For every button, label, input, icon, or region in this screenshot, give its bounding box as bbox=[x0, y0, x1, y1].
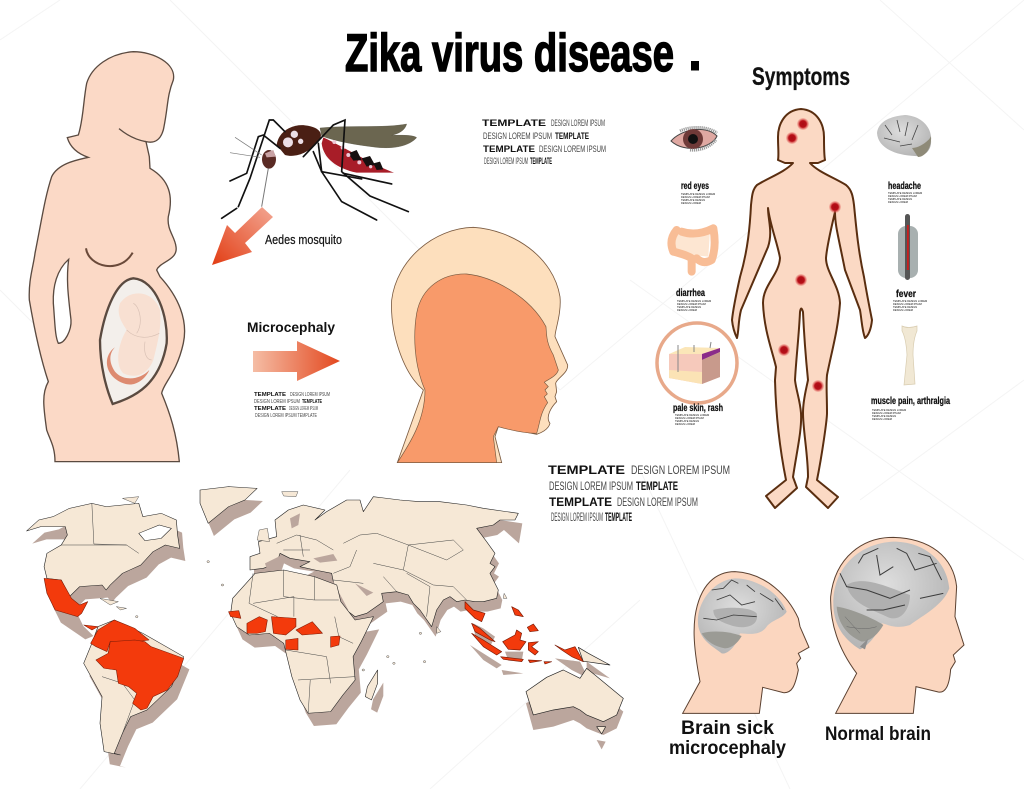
Brazil bbox=[96, 640, 184, 710]
microcephaly template text: DESIGN LOREM IPSUM TEMPLATE bbox=[255, 413, 317, 419]
label: red eyes bbox=[681, 181, 715, 205]
middle template text: TEMPLATE bbox=[605, 512, 632, 524]
label: fever: DESIGN LOREM bbox=[893, 308, 913, 312]
right arrow bbox=[253, 341, 340, 381]
land mass: Eurasia bbox=[250, 497, 518, 627]
abdomen bbox=[322, 137, 394, 173]
middle template text bbox=[548, 465, 730, 524]
label: brain sick microcephaly: Brain sick bbox=[681, 717, 774, 739]
middle template text: DESIGN LOREM IPSUM bbox=[631, 465, 730, 477]
label: red eyes: TEMPLATE DESIGN LOREM bbox=[681, 192, 715, 196]
legs bbox=[222, 120, 408, 220]
land mass: Africa bbox=[231, 570, 374, 713]
pain points bbox=[778, 118, 841, 392]
icon: red eye bbox=[671, 127, 717, 150]
label: headache: DESIGN LOREM bbox=[888, 200, 908, 204]
red affected countries: Southeast Asia bbox=[465, 602, 583, 664]
icon: skin section in circle bbox=[657, 323, 737, 403]
label: muscle pain, arthralgia: DESIGN LOREM bbox=[872, 417, 892, 421]
human body figure bbox=[732, 109, 872, 508]
middle template text: DESIGN LOREM IPSUM bbox=[617, 497, 698, 509]
microcephaly heading: Microcephaly bbox=[247, 320, 336, 335]
label: pale skin, rash: DESIGN LOREM bbox=[675, 422, 695, 426]
breast curve bbox=[86, 248, 133, 266]
head: normal brain bbox=[831, 537, 964, 713]
middle template text: TEMPLATE bbox=[636, 481, 678, 493]
country borders bbox=[61, 503, 467, 733]
label: fever bbox=[893, 289, 927, 312]
chin line bbox=[119, 129, 146, 142]
womb bbox=[100, 278, 167, 404]
icon: brain bbox=[877, 115, 931, 157]
top template text: TEMPLATE bbox=[482, 118, 546, 129]
red affected countries: Americas and Africa bbox=[44, 578, 340, 710]
label: muscle pain, arthralgia: TEMPLATE DESIGN bbox=[872, 414, 896, 418]
middle template text: DESIGN LOREM IPSUM bbox=[551, 512, 603, 524]
mosquito bbox=[222, 120, 417, 220]
Uganda bbox=[331, 636, 340, 647]
label: fever: TEMPLATE DESIGN LOREM bbox=[893, 299, 927, 303]
aedes mosquito label: Aedes mosquito bbox=[265, 232, 342, 247]
label: diarrhea: DESIGN LOREM IPSUM bbox=[677, 302, 706, 306]
top template text: DESIGN LOREM IPSUM bbox=[484, 156, 528, 167]
map shadows: Americas and Africa bbox=[32, 499, 383, 768]
head: brain sick microcephaly bbox=[683, 572, 809, 713]
placenta crescent bbox=[107, 347, 149, 385]
small islands bbox=[100, 492, 507, 671]
label: pale skin, rash: DESIGN LOREM IPSUM bbox=[675, 416, 704, 420]
label: muscle pain, arthralgia: DESIGN LOREM IPSUM bbox=[872, 411, 901, 415]
label: diarrhea bbox=[676, 288, 711, 312]
label: muscle pain, arthralgia: TEMPLATE DESIGN LOREM bbox=[872, 408, 906, 412]
middle template text: TEMPLATE bbox=[549, 497, 612, 509]
central head profile bbox=[392, 227, 568, 463]
label: headache bbox=[888, 181, 922, 204]
label: pale skin, rash: TEMPLATE DESIGN bbox=[675, 419, 699, 423]
top template text: DESIGN LOREM IPSUM bbox=[539, 144, 606, 155]
label: pale skin, rash: pale skin, rash bbox=[673, 403, 723, 414]
microcephaly template text: TEMPLATE bbox=[254, 392, 286, 398]
microcephaly template text: DESIGN LOREM IPSUM bbox=[290, 392, 330, 398]
Nigeria bbox=[271, 617, 296, 635]
microcephaly template text: DESIGN LOREM IPSUM bbox=[254, 399, 300, 405]
label: brain sick microcephaly bbox=[669, 717, 786, 759]
label: normal brain: Normal brain bbox=[825, 723, 931, 745]
proboscis bbox=[262, 168, 268, 207]
world map bbox=[27, 487, 623, 768]
label: diarrhea: TEMPLATE DESIGN bbox=[677, 305, 701, 309]
label: diarrhea: diarrhea bbox=[676, 288, 705, 299]
label: headache: TEMPLATE DESIGN bbox=[888, 197, 912, 201]
label: headache: TEMPLATE DESIGN LOREM bbox=[888, 191, 922, 195]
inner seas bbox=[265, 513, 373, 612]
icon: intestine bbox=[671, 228, 715, 272]
label: red eyes: red eyes bbox=[681, 181, 709, 192]
symptoms heading: Symptoms bbox=[752, 63, 850, 91]
top template text: DESIGN LOREM IPSUM bbox=[551, 118, 605, 129]
middle template text: TEMPLATE bbox=[548, 465, 625, 477]
northern South America bbox=[91, 620, 149, 652]
West Africa coast bbox=[229, 611, 241, 618]
icon: thermometer bbox=[898, 214, 918, 280]
Mexico bbox=[44, 578, 88, 617]
top template text bbox=[482, 118, 606, 167]
label: pale skin, rash bbox=[673, 403, 723, 426]
map shadows: Southeast Asia and Australia bbox=[470, 623, 623, 749]
label: red eyes: DESIGN LOREM bbox=[681, 201, 701, 205]
label: pale skin, rash: TEMPLATE DESIGN LOREM bbox=[675, 413, 709, 417]
label: muscle pain, arthralgia: muscle pain, arthralgia bbox=[871, 396, 950, 407]
head bbox=[262, 150, 276, 169]
microcephaly template text bbox=[254, 392, 330, 419]
wings bbox=[320, 124, 417, 148]
icon: bone bbox=[902, 326, 917, 385]
label: fever: fever bbox=[896, 289, 916, 300]
top template text: TEMPLATE bbox=[530, 156, 552, 167]
label: headache: DESIGN LOREM IPSUM bbox=[888, 194, 917, 198]
red arrow from mosquito bbox=[212, 207, 273, 265]
Ivory Coast and Ghana bbox=[247, 617, 267, 633]
microcephaly template text: DESIGN LOREM IPSUM bbox=[289, 406, 318, 412]
label: brain sick microcephaly: microcephaly bbox=[669, 737, 786, 759]
label: muscle pain, arthralgia bbox=[871, 396, 950, 421]
Central African Republic bbox=[296, 622, 322, 635]
top template text: TEMPLATE bbox=[483, 144, 535, 155]
Cameroon and Gabon bbox=[286, 638, 298, 650]
top template text: TEMPLATE bbox=[555, 131, 589, 142]
arm gap bbox=[53, 259, 71, 343]
map shadows: Eurasia bbox=[254, 507, 522, 637]
fetus bbox=[118, 293, 160, 376]
label: diarrhea: TEMPLATE DESIGN LOREM bbox=[677, 299, 711, 303]
label: red eyes: DESIGN LOREM IPSUM bbox=[681, 195, 710, 199]
Central America bbox=[84, 625, 98, 630]
title: Zika virus disease bbox=[345, 24, 674, 83]
middle template text: DESIGN LOREM IPSUM bbox=[549, 481, 633, 493]
label: fever: TEMPLATE DESIGN bbox=[893, 305, 917, 309]
thorax bbox=[277, 125, 321, 156]
label: diarrhea: DESIGN LOREM bbox=[677, 308, 697, 312]
land mass: Australia bbox=[526, 647, 623, 734]
label: red eyes: TEMPLATE DESIGN bbox=[681, 198, 705, 202]
pregnant woman silhouette bbox=[29, 52, 185, 462]
microcephaly template text: TEMPLATE bbox=[254, 406, 286, 412]
top template text: DESIGN LOREM IPSUM bbox=[483, 131, 552, 142]
fetus detail lines bbox=[127, 303, 159, 360]
label: fever: DESIGN LOREM IPSUM bbox=[893, 302, 922, 306]
label: headache: headache bbox=[888, 181, 921, 192]
microcephaly template text: TEMPLATE bbox=[302, 399, 322, 405]
land masses: Americas and Africa bbox=[27, 487, 378, 755]
